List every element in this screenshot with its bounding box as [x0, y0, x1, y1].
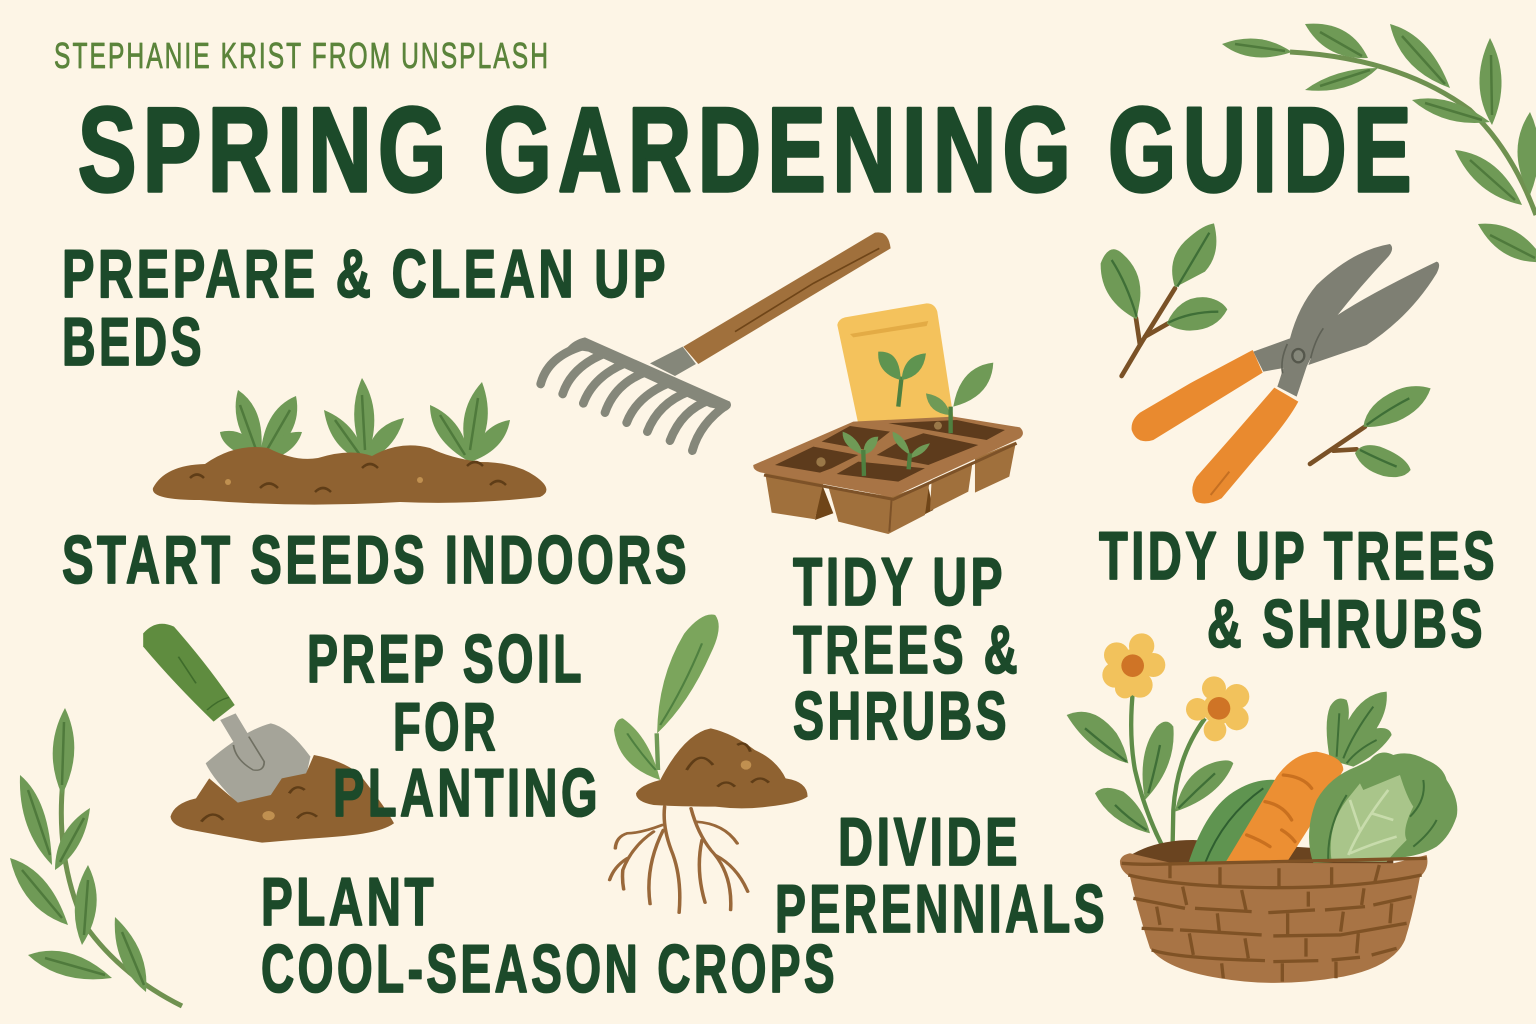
carrot greens	[1327, 692, 1392, 767]
heading: tidy up trees and shrubs, center	[793, 544, 1021, 754]
heading: tidy up trees and shrubs, center: SHRUBS	[793, 678, 1010, 754]
carrot	[1225, 752, 1343, 865]
heading: plant cool-season crops: PLANT	[261, 864, 437, 940]
flowers	[1067, 633, 1249, 860]
lettuce	[1309, 753, 1457, 863]
icon: trowel in soil	[143, 624, 394, 843]
heading: tidy up trees and shrubs, center: TIDY UP	[793, 544, 1006, 620]
icon: plant with roots	[610, 615, 808, 913]
heading: tidy up trees and shrubs, right	[1099, 518, 1498, 662]
basket body	[1120, 853, 1427, 983]
heading: divide perennials: DIVIDE	[838, 804, 1021, 880]
decorative sprig: bottom left	[10, 708, 182, 1006]
heading: plant cool-season crops: COOL-SEASON CROPS	[261, 931, 838, 1007]
icon: basket with flowers and vegetables	[1067, 633, 1457, 983]
icon: garden bed with seedlings	[153, 378, 546, 505]
heading: plant cool-season crops	[261, 864, 838, 1007]
heading: prepare and clean up beds: PREPARE & CLEAN UP	[62, 236, 669, 312]
icon: seed packet and seedling tray	[753, 303, 1023, 534]
icon: rake	[541, 232, 891, 451]
heading: divide perennials: PERENNIALS	[775, 871, 1108, 947]
heading: prep soil for planting	[307, 621, 601, 831]
icon: pruning shears with twigs	[1101, 223, 1439, 504]
basket inner	[1123, 840, 1393, 867]
heading: prep soil for planting: PLANTING	[333, 755, 601, 831]
heading: prep soil for planting: FOR	[393, 689, 499, 765]
decorative sprig: top right	[1222, 24, 1536, 262]
heading: tidy up trees and shrubs, center: TREES &	[793, 612, 1021, 688]
shear handles	[1132, 350, 1298, 504]
seed packet	[837, 303, 953, 424]
caption: photo credit: STEPHANIE KRIST FROM UNSPLASH	[54, 35, 550, 76]
heading: prepare and clean up beds: BEDS	[62, 304, 205, 380]
heading: start seeds indoors: START SEEDS INDOORS	[62, 522, 690, 598]
heading: prepare and clean up beds	[62, 236, 669, 380]
green leaf	[1188, 780, 1277, 867]
heading: divide perennials	[775, 804, 1108, 947]
heading: prep soil for planting: PREP SOIL	[307, 621, 585, 697]
shear blades	[1253, 244, 1439, 397]
